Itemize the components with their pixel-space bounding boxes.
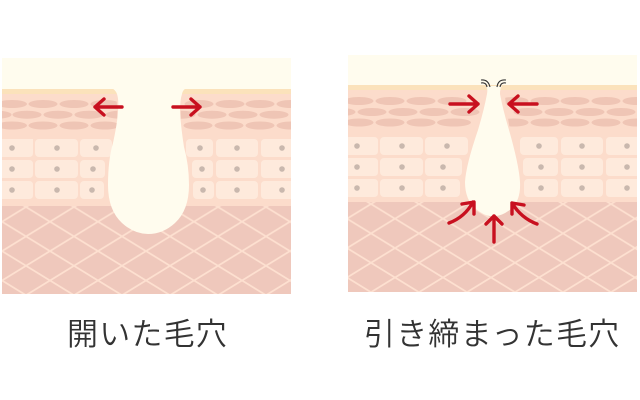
label: tightened pore: 引き締まった毛穴: [364, 317, 620, 352]
flattened cells right: [180, 100, 291, 130]
tightened pore: [465, 86, 520, 216]
rounded cells left: [348, 137, 468, 197]
epidermis layer: [2, 94, 291, 206]
rounded cells left: [2, 139, 112, 199]
arrow: pointing left: [509, 96, 537, 112]
panel: open pore skin diagram: [0, 58, 306, 294]
flattened cells left: [348, 97, 480, 126]
yellow skin band: [2, 89, 291, 95]
arrow: pointing right: [450, 96, 478, 112]
arrow: pointing up: [486, 216, 502, 242]
arrow: pointing left: [95, 99, 122, 115]
yellow skin band: [348, 85, 637, 91]
arrow: lower right curved: [512, 203, 537, 224]
dermis layer with collagen lattice: [348, 202, 637, 292]
surface layer: [348, 55, 637, 86]
arrow: pointing right: [173, 99, 200, 115]
panel: tightened pore skin diagram: [326, 55, 640, 292]
open pore: [108, 88, 189, 234]
tension marks right: [497, 80, 506, 87]
flattened cells right: [500, 97, 640, 126]
arrow: lower left curved: [449, 202, 474, 223]
epidermis layer: [348, 90, 637, 202]
label: open pore: 開いた毛穴: [67, 317, 228, 352]
rounded cells right: [520, 137, 637, 197]
rounded cells right: [186, 139, 291, 199]
dermis layer with collagen lattice: [2, 206, 291, 294]
tension marks left: [481, 80, 490, 87]
surface layer: [2, 58, 291, 90]
flattened cells left: [2, 100, 118, 130]
